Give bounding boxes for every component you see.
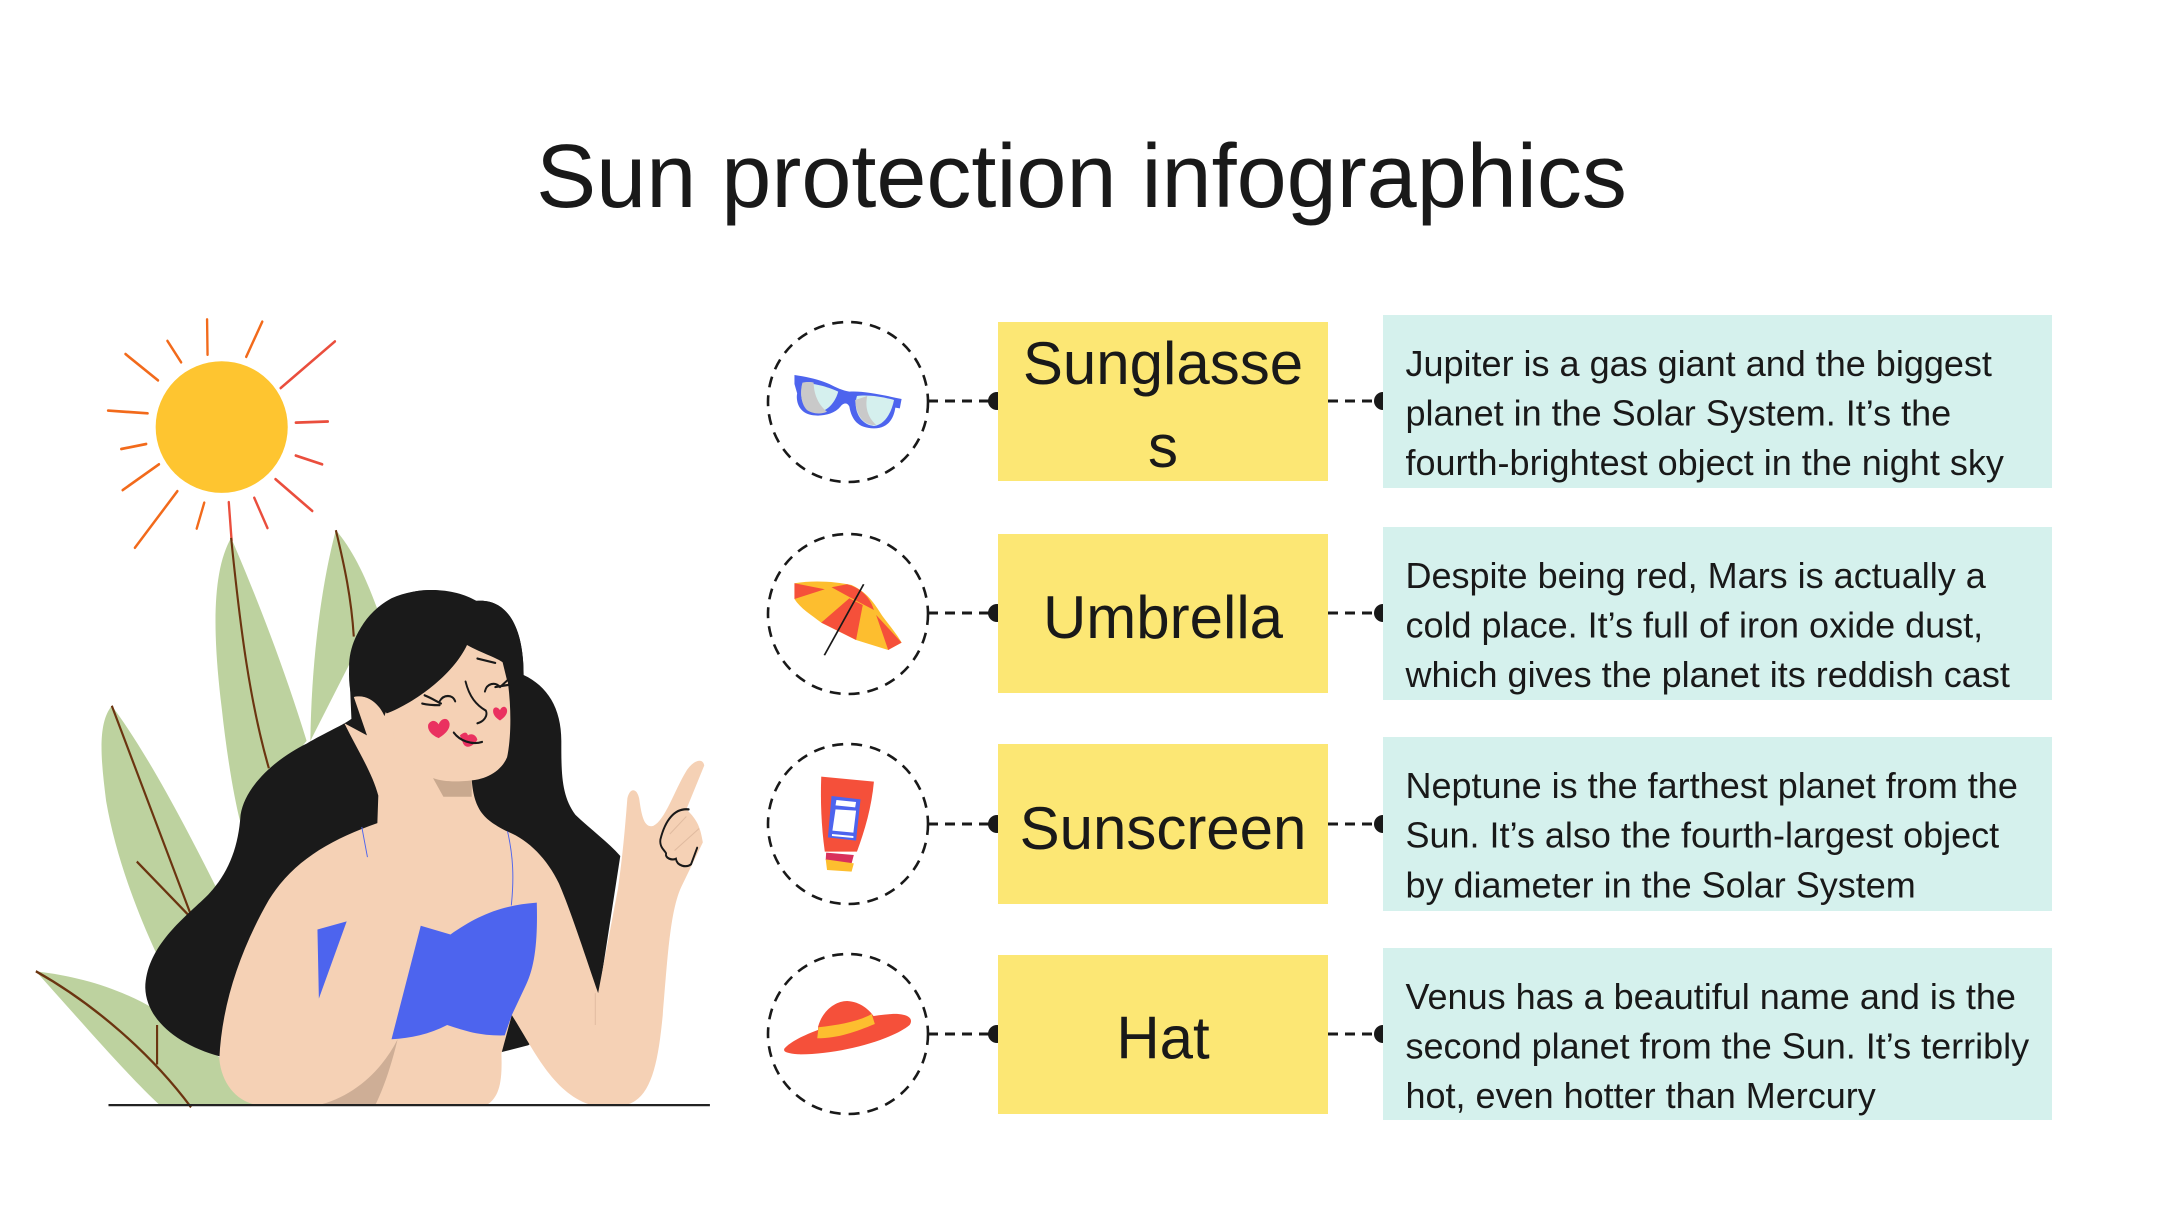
icon: sunscreen tube (768, 744, 928, 904)
facial features (422, 659, 508, 747)
row: hat (768, 948, 2052, 1120)
label: Umbrella (998, 534, 1328, 693)
label: Sunglasses: s (1148, 413, 1178, 480)
icon: sunglasses (768, 322, 928, 482)
description: Venus: Venus has a beautiful name and is the (1406, 976, 2016, 1017)
row: sunscreen (768, 737, 2052, 911)
label: Sunscreen (998, 744, 1328, 904)
icon: sun (108, 319, 335, 548)
label: Sunscreen: Sunscreen (1020, 795, 1306, 862)
label: Umbrella: Umbrella (1043, 584, 1284, 651)
arm shadow (316, 1039, 398, 1106)
title: Sun protection infographics (536, 127, 1627, 227)
description: Neptune: Neptune is the farthest planet from the (1406, 765, 2018, 806)
description: Venus (1383, 948, 2052, 1120)
ground line (108, 1103, 710, 1107)
description: Mars (1383, 527, 2052, 700)
description: Jupiter: Jupiter is a gas giant and the biggest (1406, 343, 1992, 384)
pointing hand lines (595, 809, 699, 1025)
description: Venus: hot, even hotter than Mercury (1406, 1075, 1876, 1116)
label: Hat: Hat (1116, 1004, 1210, 1072)
description: Neptune (1383, 737, 2052, 911)
body: arms and torso (219, 696, 704, 1106)
description: Venus: second planet from the Sun. It’s terribly (1406, 1026, 2029, 1066)
connectors (928, 392, 1392, 410)
label: Hat (998, 955, 1328, 1114)
description: Jupiter (1383, 315, 2052, 488)
icon: umbrella (768, 534, 928, 694)
description: Jupiter: planet in the Solar System. It’s the (1406, 392, 1951, 434)
description: Jupiter: fourth-brightest object in the night sky (1406, 442, 2004, 483)
face (387, 645, 510, 781)
connectors (928, 604, 1392, 622)
row: umbrella (768, 527, 2052, 700)
description: Mars: cold place. It’s full of iron oxide dust, (1406, 604, 1983, 646)
leaves (36, 530, 377, 1107)
description: Neptune: Sun. It’s also the fourth-largest object (1406, 814, 1999, 856)
row: sunglasses (768, 315, 2052, 488)
connectors (928, 815, 1392, 833)
description: Mars: which gives the planet its reddish cast (1404, 654, 2010, 695)
neck shadow (433, 778, 472, 797)
description: Neptune: by diameter in the Solar System (1406, 864, 1916, 906)
label: Sunglasses: Sunglasse (1023, 330, 1303, 397)
icon: hat (768, 954, 928, 1114)
description: Mars: Despite being red, Mars is actually a (1406, 555, 1987, 596)
label: Sunglasses (998, 322, 1328, 481)
connectors (928, 1025, 1392, 1043)
hair: back (145, 590, 620, 1056)
hair: fringe (349, 590, 524, 716)
bodice (317, 827, 537, 1039)
illustration: woman under the sun (36, 319, 710, 1107)
